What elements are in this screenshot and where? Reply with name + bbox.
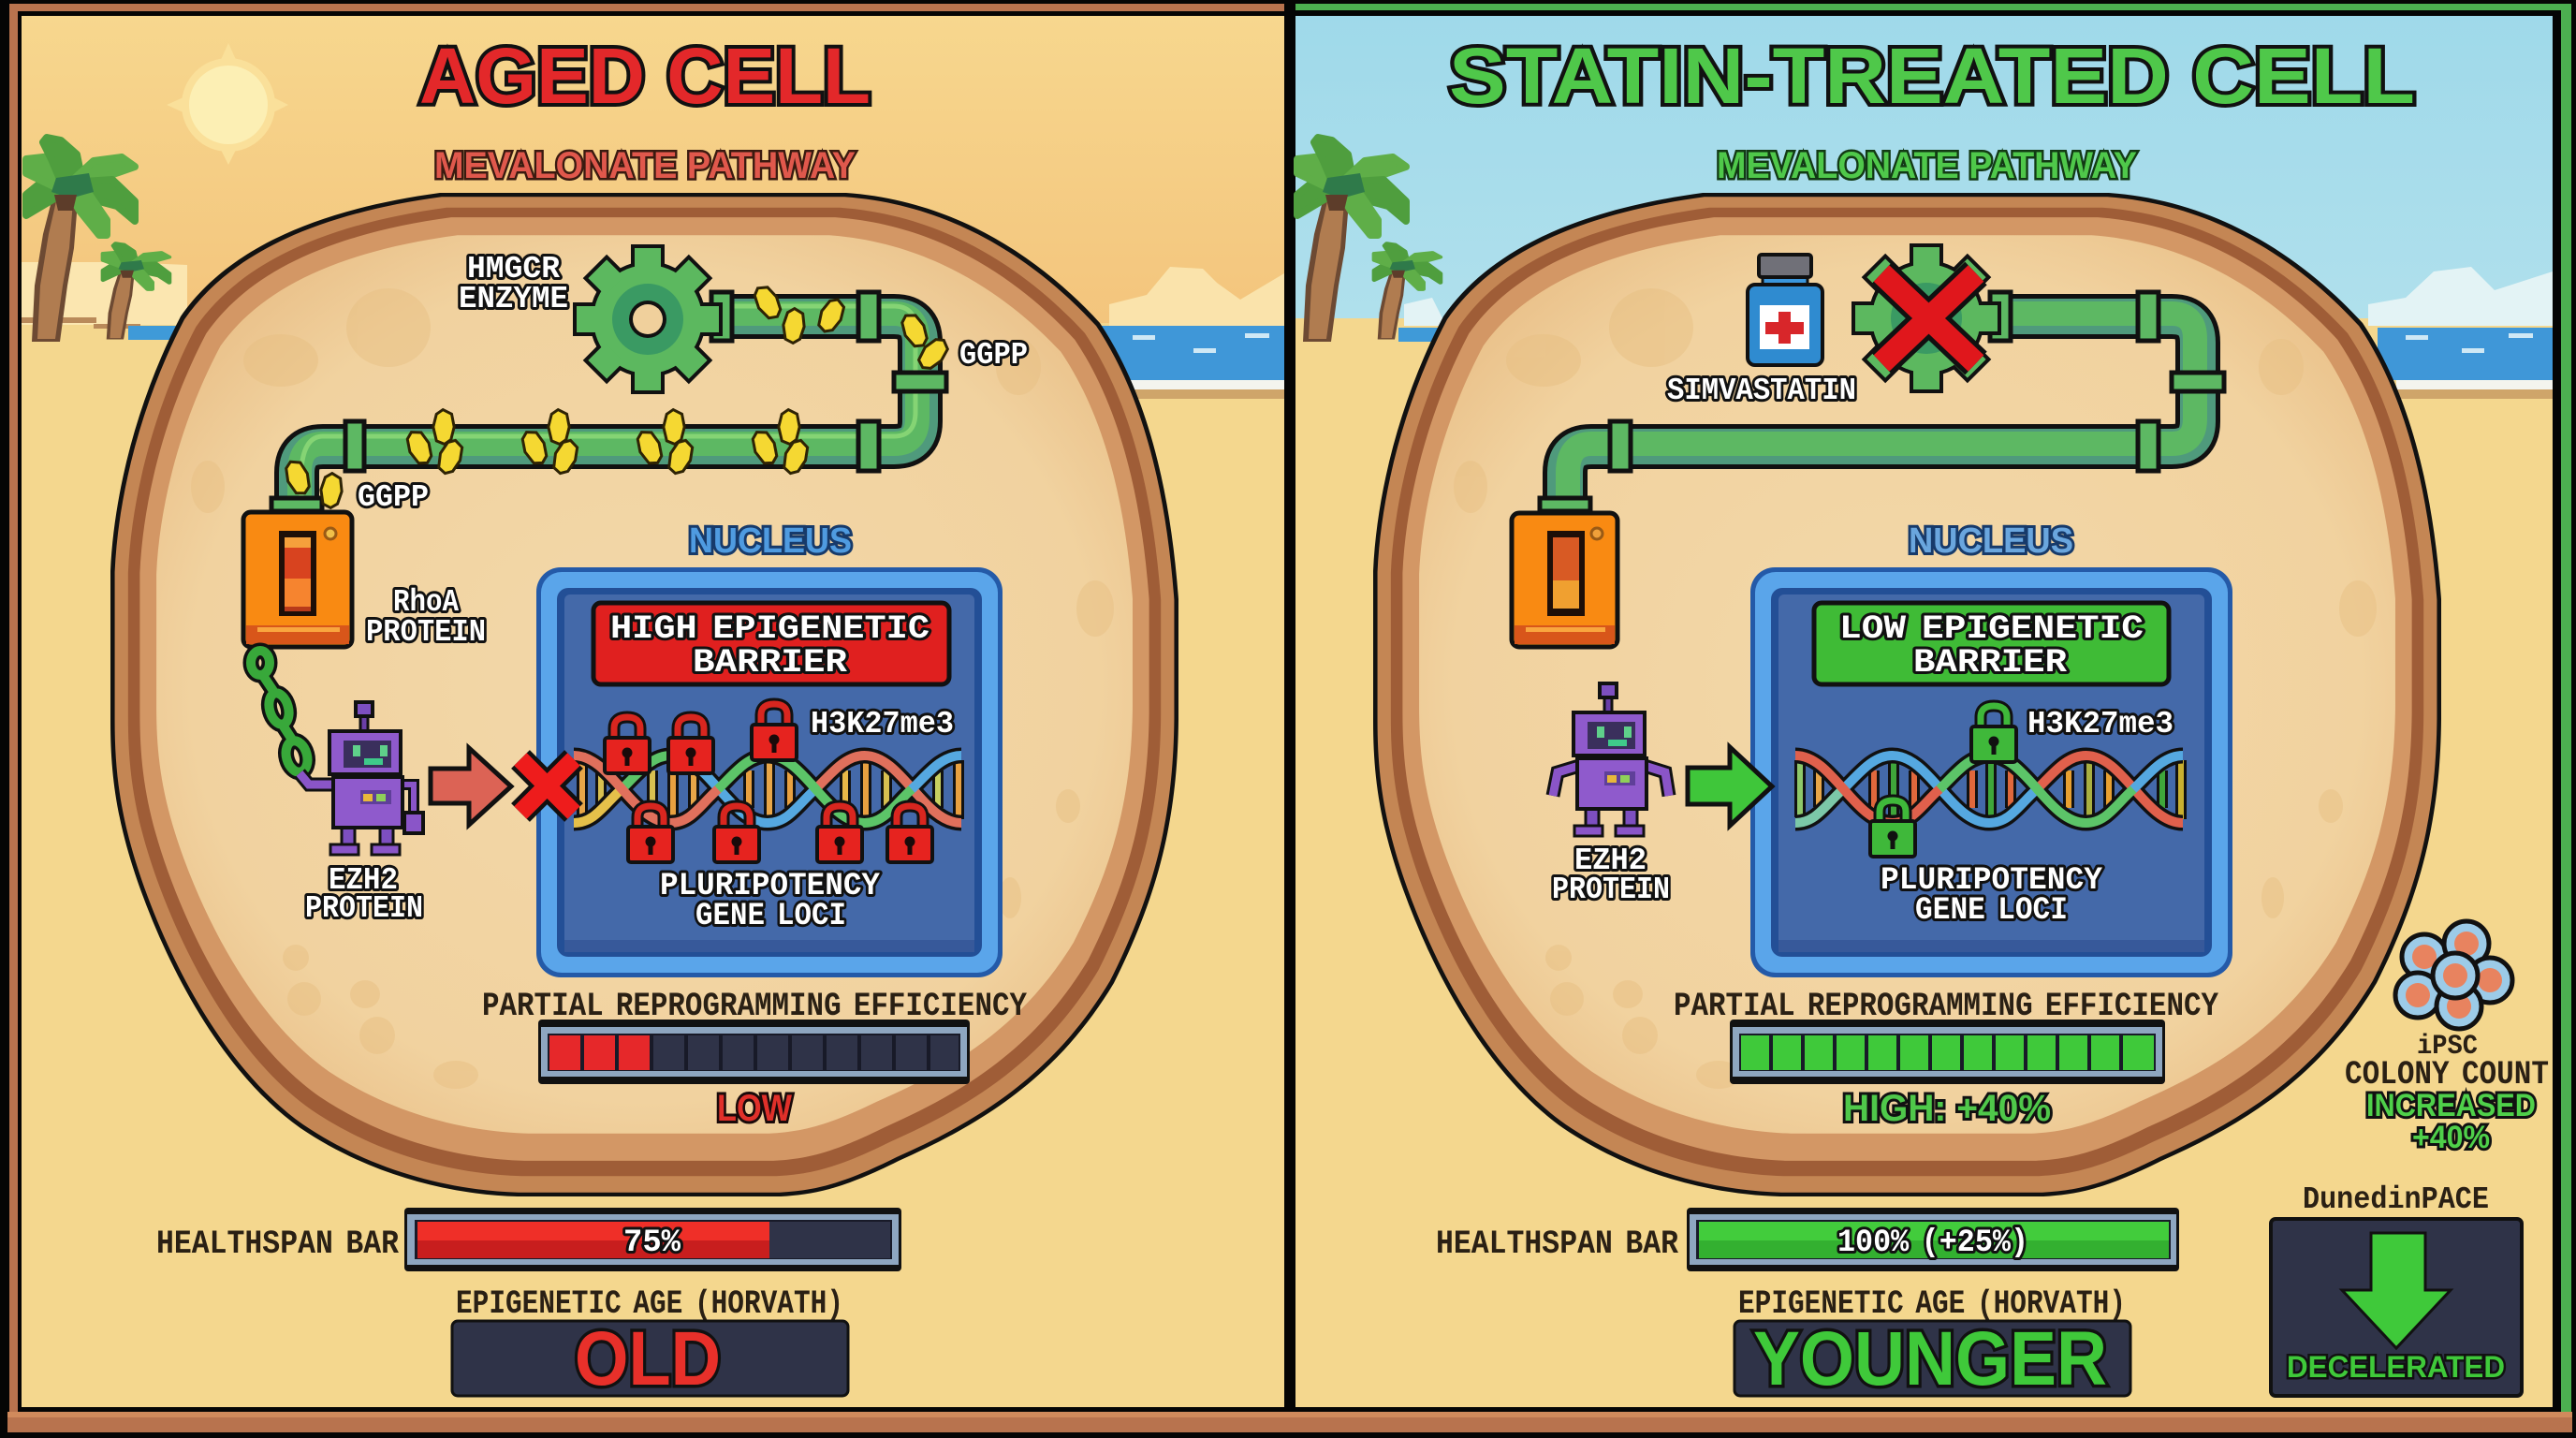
beach background right — [1295, 16, 2553, 1407]
label: pluripotency gene loci: GENE LOCI — [695, 899, 846, 934]
label: RhoA protein: PROTEIN — [366, 615, 486, 650]
label: EZH2 protein: EZH2 — [329, 863, 398, 898]
label: EZH2 protein: EZH2 — [1574, 844, 1647, 878]
label: H3K27me3: H3K27me3 — [2027, 707, 2174, 741]
label: pluripotency gene loci: PLURIPOTENCY — [1881, 863, 2103, 899]
icon: repressive locks — [605, 704, 932, 862]
icon: EZH2 robot — [1553, 683, 1669, 836]
icon: inhibited HMGCR gear — [1855, 247, 1998, 389]
icon: green arrow — [1688, 747, 1772, 826]
label: GGPP right: GGPP — [959, 338, 1028, 373]
icon: pipe — [271, 292, 946, 511]
label: healthspan bar: HEALTHSPAN BAR — [156, 1225, 399, 1263]
label: GGPP lower: GGPP — [358, 480, 429, 515]
label: simvastatin: SIMVASTATIN — [1667, 374, 1856, 408]
label: pluripotency gene loci — [1881, 863, 2103, 929]
heading: mevalonate pathway: MEVALONATE PATHWAY — [434, 145, 856, 186]
label: HMGCR enzyme: ENZYME — [459, 282, 568, 316]
cell membrane — [1373, 193, 2441, 1196]
label: RhoA protein: RhoA — [393, 585, 459, 620]
icon: DNA helix — [574, 756, 961, 823]
label: high +40%: HIGH: +40% — [1843, 1088, 2051, 1129]
label: nucleus: NUCLEUS — [689, 521, 852, 561]
label: iPSC colony count: INCREASED — [2366, 1088, 2536, 1123]
label: low epigenetic barrier — [1814, 603, 2169, 684]
label: low: LOW — [717, 1088, 792, 1129]
label: epigenetic age: EPIGENETIC AGE (HORVATH) — [456, 1285, 843, 1323]
label: nucleus: NUCLEUS — [1909, 521, 2073, 561]
label: epigenetic age: EPIGENETIC AGE (HORVATH) — [1738, 1285, 2126, 1323]
icon: pipe — [1540, 292, 2224, 511]
label: high epigenetic barrier — [593, 603, 949, 684]
icon: few locks — [1870, 706, 2016, 857]
title: AGED CELL — [419, 32, 871, 120]
icon: iPSC colony — [2395, 921, 2512, 1029]
icon: chain — [251, 651, 311, 774]
bar chart: reprogramming efficiency low — [538, 1020, 970, 1084]
label: partial reprogramming efficiency: PARTIAL REPROGRAMMING EFFICIENCY — [1674, 988, 2218, 1025]
label: EZH2 protein: PROTEIN — [1552, 873, 1670, 907]
label: pluripotency gene loci — [660, 869, 881, 934]
label: pluripotency gene loci: PLURIPOTENCY — [660, 869, 881, 904]
icon: blocked arrow — [431, 748, 511, 825]
panel: nucleus — [536, 567, 1003, 977]
bar chart: healthspan 75% — [404, 1208, 901, 1271]
badge: old — [452, 1316, 848, 1401]
icon: large palm tree — [26, 138, 135, 342]
label: partial reprogramming efficiency: PARTIAL REPROGRAMMING EFFICIENCY — [482, 988, 1027, 1025]
bar chart: healthspan 75%: 75% — [623, 1225, 681, 1261]
icon: GGPP molecules — [284, 283, 953, 509]
label: pluripotency gene loci: GENE LOCI — [1915, 893, 2068, 929]
title: STATIN-TREATED CELL — [1449, 32, 2415, 120]
panel: DunedinPACE decelerated — [2271, 1219, 2522, 1396]
label: H3K27me3: H3K27me3 — [811, 707, 954, 741]
bar chart: reprogramming efficiency high — [1730, 1020, 2165, 1084]
panel: aged cell — [22, 16, 1284, 1407]
label: HMGCR enzyme: HMGCR — [467, 252, 560, 286]
icon: HMGCR gear — [577, 248, 719, 390]
label: DunedinPACE: DunedinPACE — [2303, 1182, 2489, 1217]
label: iPSC colony count: iPSC — [2417, 1031, 2478, 1063]
label: iPSC colony count: COLONY COUNT — [2345, 1056, 2549, 1093]
icon: RhoA switch — [243, 512, 352, 647]
label: HMGCR enzyme — [459, 252, 568, 316]
label: RhoA protein — [366, 585, 486, 650]
panel: statin-treated cell — [1295, 16, 2553, 1407]
label: iPSC colony count — [2345, 1031, 2549, 1155]
icon: simvastatin vial — [1748, 255, 1822, 365]
icon: DNA helix — [1795, 756, 2183, 823]
icon: large palm tree — [1297, 138, 1406, 342]
icon: small palm tree — [1374, 243, 1441, 340]
icon: small palm tree — [103, 243, 169, 340]
label: low epigenetic barrier: BARRIER — [1913, 644, 2067, 682]
label: healthspan bar: HEALTHSPAN BAR — [1436, 1225, 1678, 1263]
cell membrane — [110, 193, 1178, 1196]
label: EZH2 protein — [1552, 844, 1670, 907]
icon: red X — [520, 759, 574, 813]
heading: mevalonate pathway: MEVALONATE PATHWAY — [1717, 145, 2137, 186]
icon: EZH2 robot — [300, 702, 423, 855]
panel: DunedinPACE decelerated: DECELERATED — [2287, 1350, 2505, 1384]
label: low epigenetic barrier: LOW EPIGENETIC — [1839, 610, 2144, 648]
bar chart: healthspan 100%: 100% (+25%) — [1837, 1225, 2028, 1261]
bar chart: healthspan 100% — [1687, 1208, 2179, 1271]
label: iPSC colony count: +40% — [2412, 1120, 2490, 1155]
badge: younger: YOUNGER — [1753, 1316, 2107, 1401]
label: high epigenetic barrier: HIGH EPIGENETIC — [610, 610, 929, 648]
label: EZH2 protein — [305, 863, 423, 926]
badge: old: OLD — [575, 1316, 721, 1401]
panel: nucleus — [1750, 567, 2232, 977]
label: high epigenetic barrier: BARRIER — [693, 644, 847, 682]
beach background left — [22, 16, 1284, 1407]
label: EZH2 protein: PROTEIN — [305, 891, 423, 926]
icon: RhoA switch — [1512, 513, 1617, 647]
